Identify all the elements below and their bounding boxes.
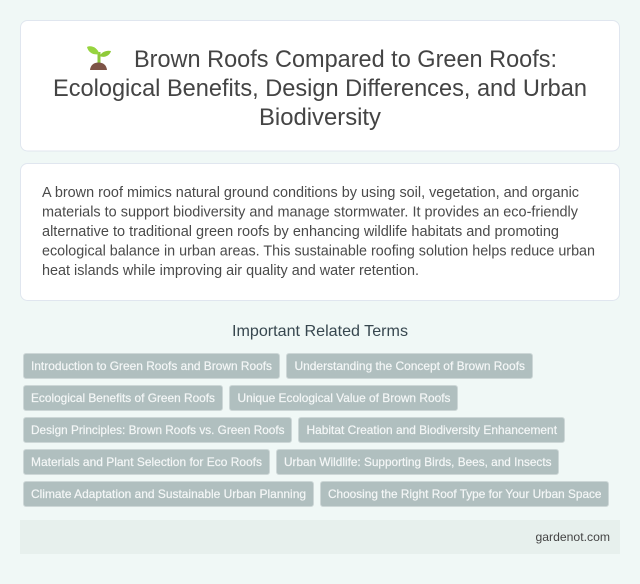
description text: heat islands while improving air quality and water retention. — [42, 263, 419, 279]
description text: A brown roof mimics natural ground conditions by using soil, vegetation, and organic — [42, 185, 579, 201]
tag: choosing roof type: Choosing the Right Roof Type for Your Urban Space — [328, 487, 602, 501]
tag: choosing roof type — [320, 482, 608, 506]
tag: urban wildlife — [276, 450, 558, 474]
tag: climate adaptation — [24, 482, 314, 506]
tag: concept: Understanding the Concept of Brown Roofs — [294, 359, 525, 373]
tag: ecological benefits: Ecological Benefits of Green Roofs — [31, 391, 215, 405]
tag: concept — [286, 354, 532, 378]
title text: Brown Roofs Compared to Green Roofs: — [134, 46, 557, 73]
panel: title card — [20, 20, 620, 151]
tag: ecological value — [230, 386, 458, 410]
tag: materials: Materials and Plant Selection for Eco Roofs — [31, 455, 262, 469]
tag: ecological value: Unique Ecological Value of Brown Roofs — [238, 391, 450, 405]
tag: design principles — [24, 418, 292, 442]
tag: climate adaptation: Climate Adaptation and Sustainable Urban Planning — [31, 487, 306, 501]
tag: urban wildlife: Urban Wildlife: Supporting Birds, Bees, and Insects — [284, 455, 552, 469]
tag: habitat creation — [298, 418, 564, 442]
tag: ecological benefits — [24, 386, 222, 410]
description text: materials to support biodiversity and manage stormwater. It provides an eco-friendly — [42, 204, 579, 220]
title text — [53, 46, 587, 131]
tag: materials — [24, 450, 270, 474]
footer bar — [20, 520, 620, 554]
icon: seedling — [87, 46, 111, 70]
title text: Biodiversity — [259, 104, 381, 131]
description text: alternative to traditional green roofs by enhancing wildlife habitats and promoting — [42, 224, 559, 240]
panel: description card — [20, 164, 620, 300]
tag list — [24, 354, 608, 506]
title text: Ecological Benefits, Design Differences, and Urban — [53, 75, 587, 102]
tag: introduction — [24, 354, 280, 378]
tag: design principles: Design Principles: Brown Roofs vs. Green Roofs — [31, 423, 284, 437]
tag: introduction: Introduction to Green Roofs and Brown Roofs — [31, 359, 272, 373]
footer source text: gardenot.com — [536, 530, 610, 544]
tag: habitat creation: Habitat Creation and Biodiversity Enhancement — [306, 423, 558, 437]
description text: ecological balance in urban areas. This sustainable roofing solution helps reduce urban — [42, 244, 595, 260]
heading: important related terms: Important Related Terms — [232, 323, 408, 340]
description text — [42, 185, 595, 279]
